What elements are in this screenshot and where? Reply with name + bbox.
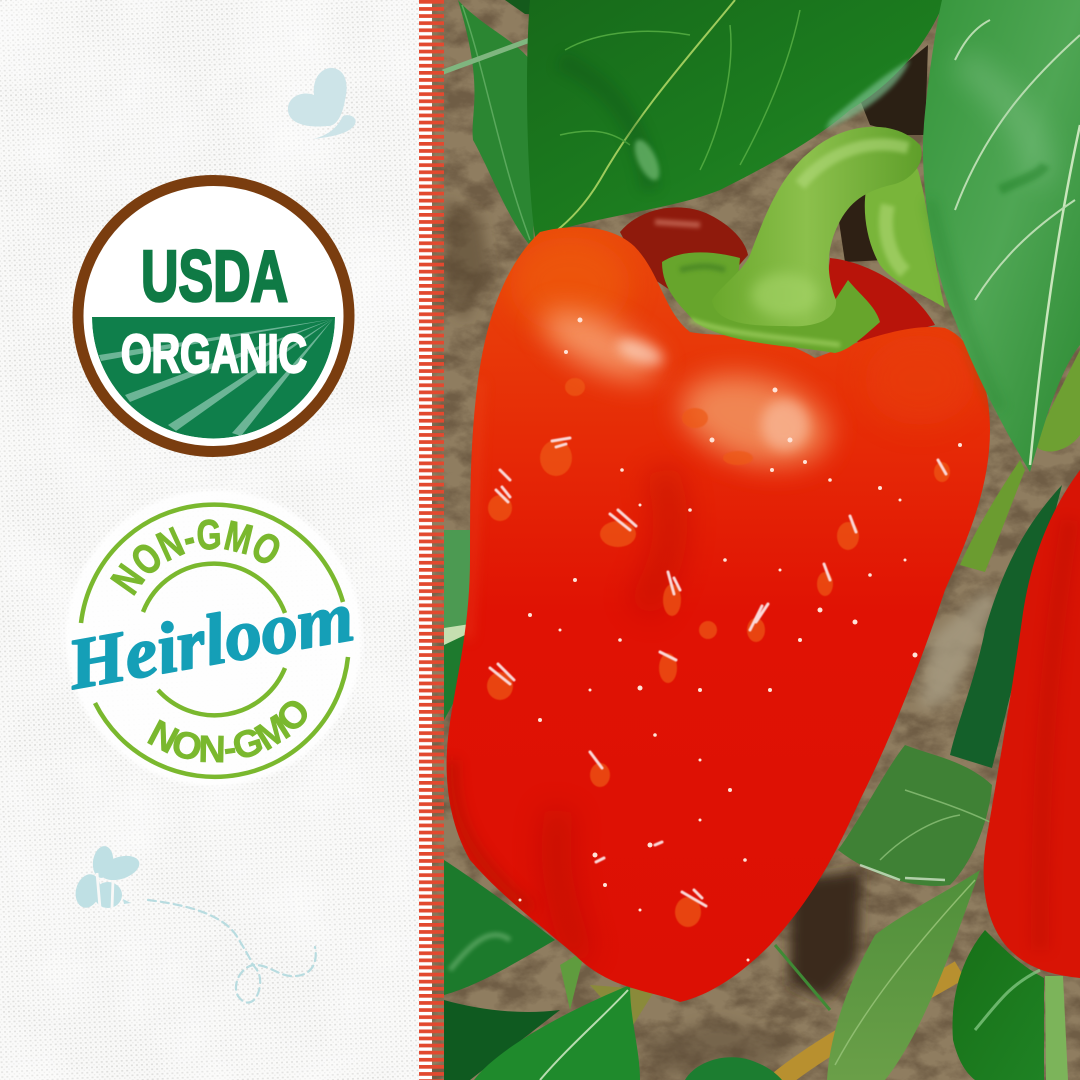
top text: NON-GMO (110, 519, 280, 596)
outer and inner rings (81, 505, 348, 777)
Heirloom script: Heirloom (61, 576, 359, 705)
pepper back lobes (620, 207, 935, 345)
leaf: lower long (827, 870, 980, 1080)
calyx (662, 252, 880, 353)
water droplets (487, 318, 962, 962)
ORGANIC wordmark: ORGANIC (121, 324, 307, 384)
leaf: bottom left (444, 860, 782, 1080)
divider: red striped ribbon (419, 0, 444, 1080)
leaf: lower right large (838, 745, 992, 886)
shading and highlights (452, 237, 975, 960)
USDA wordmark: USDA (141, 237, 288, 317)
right pepper (984, 470, 1080, 978)
right side stalks (960, 350, 1080, 572)
leaf: far left upright (443, 0, 545, 250)
panel: linen background (0, 0, 432, 1080)
green field with furrows (92, 317, 335, 438)
leaf: top large (527, 0, 945, 237)
leaf: dark right behind pepper (950, 485, 1062, 768)
soil (432, 0, 1080, 1080)
icon: butterfly (288, 68, 356, 139)
main pepper body (447, 227, 990, 1002)
badge: Non-GMO Heirloom (61, 490, 362, 786)
badge: USDA Organic (78, 180, 349, 452)
stem (712, 127, 945, 326)
leaf: lower right shiny (952, 930, 1068, 1080)
panel: bell pepper photograph (432, 0, 1080, 1080)
bottom text: NON-GMO (147, 700, 308, 762)
leaf: top right large (923, 0, 1080, 472)
icon: bee with dashed flight path (72, 845, 316, 1003)
stems: thin and amber (775, 945, 960, 1080)
leaf: left mid fragments (444, 530, 473, 720)
